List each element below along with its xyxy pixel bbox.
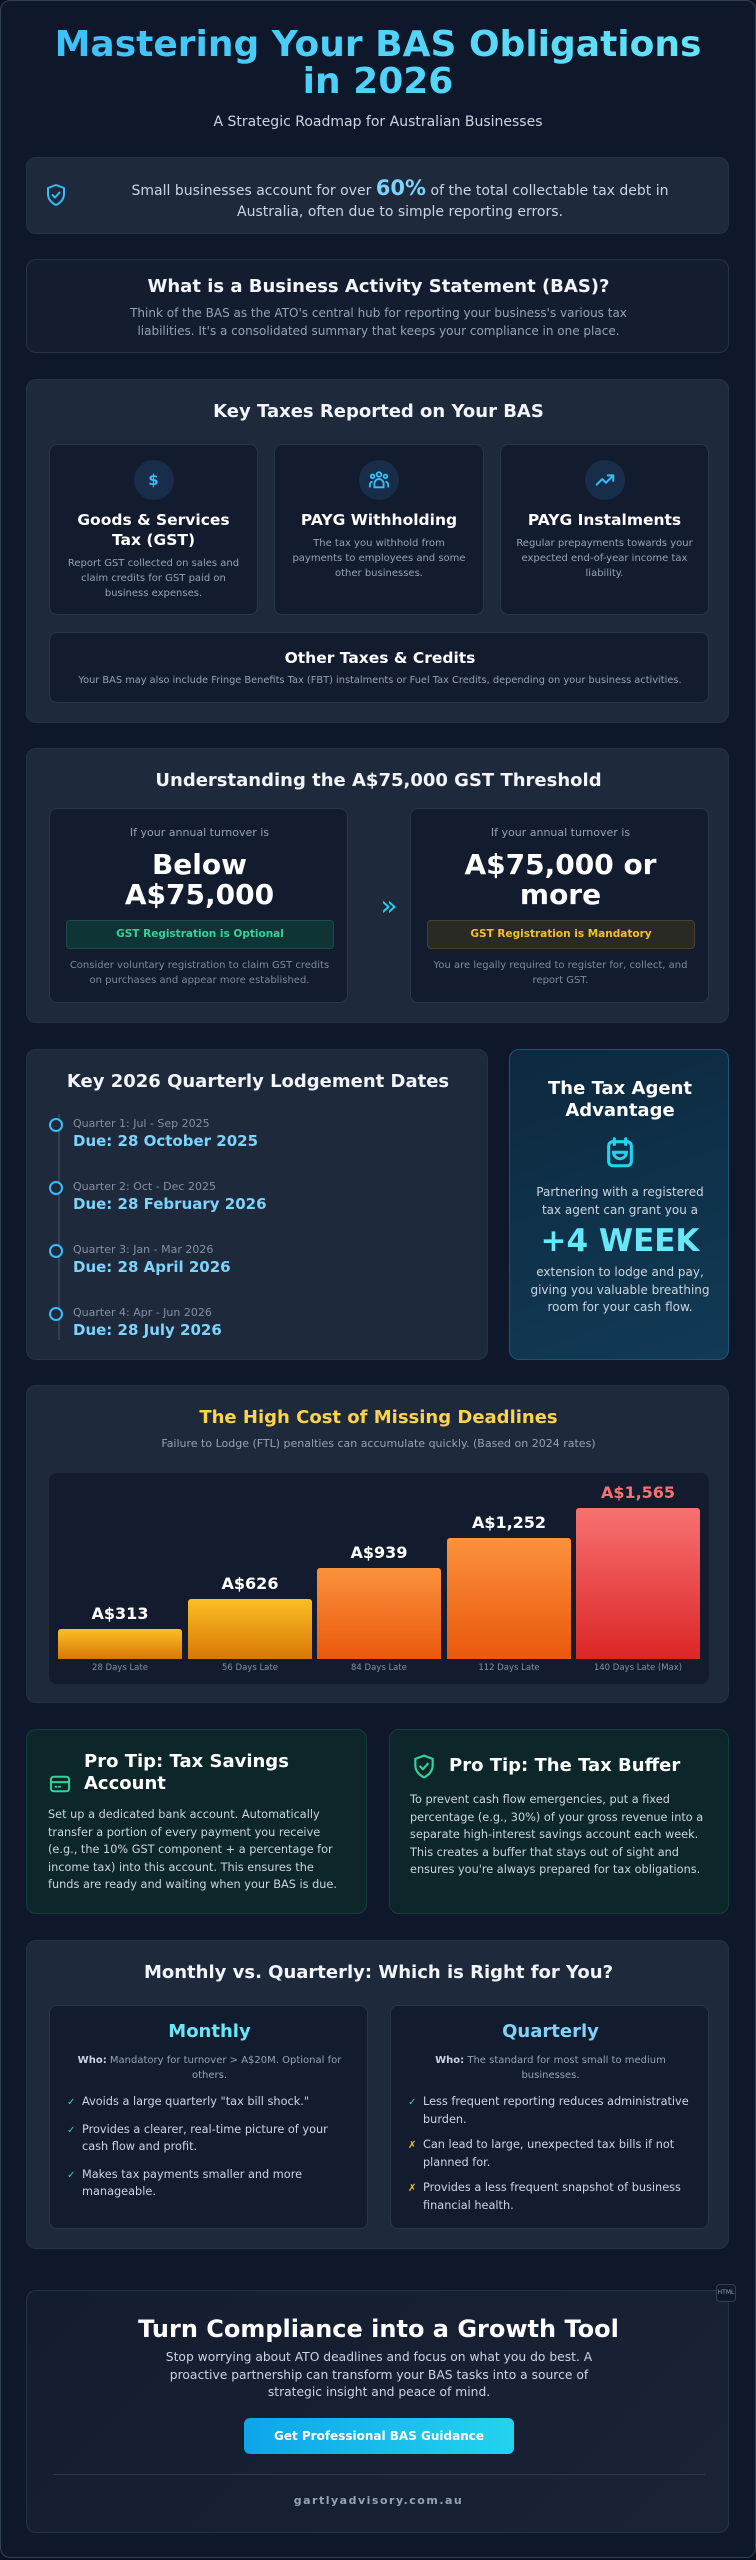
item q4: Due: 28 July 2026 <box>73 1321 222 1339</box>
icon: dollar: $ <box>148 471 159 489</box>
card: PAYG instalments <box>500 444 709 615</box>
button <box>244 2418 514 2454</box>
item q3 <box>49 1243 231 1276</box>
badge: HTML: HTML <box>718 2289 734 2296</box>
stat callout <box>26 157 729 234</box>
bar 84: 84 Days Late <box>351 1663 407 1673</box>
card: above: more <box>520 878 601 911</box>
item q2: Due: 28 February 2026 <box>73 1195 267 1213</box>
bar 56: 56 Days Late <box>222 1663 278 1673</box>
bar 112: A$1,252 <box>472 1513 546 1532</box>
bar 56 <box>188 1574 312 1673</box>
title <box>0 26 756 100</box>
heading: Key 2026 Quarterly Lodgement Dates <box>67 1071 449 1092</box>
title: Mastering Your BAS Obligations <box>55 24 701 65</box>
card: monthly: Avoids a large quarterly "tax bill shock." <box>82 2095 309 2108</box>
heading: Monthly vs. Quarterly: Which is Right for You? <box>144 1962 613 1983</box>
bar 28 <box>58 1604 182 1673</box>
text: To prevent cash flow emergencies, put a fixed percentage (e.g., 30%) of your gross revenue into a separate high-interest savings account each week. This creates a buffer that stays out of sight and ensures you're always prepared for tax obligations. <box>410 1793 703 1876</box>
card: GST <box>49 444 258 615</box>
card: below <box>49 808 348 1003</box>
panel: tip savings account <box>26 1729 367 1914</box>
item q2: Quarter 2: Oct - Dec 2025 <box>73 1180 216 1193</box>
domain: gartlyadvisory.com.au <box>294 2494 463 2507</box>
heading: Turn Compliance into a Growth Tool <box>138 2315 619 2343</box>
heading: Advantage <box>565 1100 675 1121</box>
icon: users <box>359 460 399 500</box>
item q4: Quarter 4: Apr - Jun 2026 <box>73 1306 212 1319</box>
icon: calendar <box>607 1137 633 1168</box>
card: monthly: ✓ <box>67 2170 75 2180</box>
heading <box>84 1751 289 1794</box>
card: PAYG withholding: PAYG Withholding <box>301 511 457 529</box>
panel: tax agent advantage <box>509 1049 729 1360</box>
card: other taxes <box>49 632 709 703</box>
card: monthly: ✓ <box>67 2097 75 2108</box>
panel: cost of missing deadlines <box>26 1385 729 1703</box>
card: below: GST Registration is Optional <box>116 928 284 940</box>
heading: Pro Tip: Tax Savings <box>84 1751 289 1772</box>
heading: The Tax Agent <box>548 1078 692 1099</box>
button: Get Professional BAS Guidance <box>274 2429 484 2443</box>
heading: Account <box>84 1773 166 1794</box>
card: below: A$75,000 <box>125 878 274 911</box>
text: Think of the BAS as the ATO's central hub for reporting your business's various tax liabilities. It's a consolidated summary that keeps your compliance in one place. <box>130 306 627 338</box>
stat text: Small businesses account for over 60% of the total collectable tax debt in Australia, often due to simple reporting errors. <box>131 176 668 220</box>
text: Set up a dedicated bank account. Automatically transfer a portion of every payment you receive (e.g., the 10% GST component + a percentage for income tax) into this account. This ensures the funds are ready and waiting when your BAS is due. <box>48 1808 337 1891</box>
heading: What is a Business Activity Statement (BAS)? <box>148 276 609 297</box>
item q3: Quarter 3: Jan - Mar 2026 <box>73 1243 213 1256</box>
icon: card <box>50 1776 70 1792</box>
card: monthly <box>49 2005 368 2229</box>
heading: Pro Tip: The Tax Buffer <box>449 1755 680 1776</box>
icon: shield check <box>414 1754 434 1778</box>
card: quarterly <box>390 2005 709 2229</box>
heading <box>548 1078 692 1121</box>
card: quarterly: ✗ <box>408 2183 416 2194</box>
card: GST: Report GST collected on sales and claim credits for GST paid on business expenses. <box>68 558 239 599</box>
item q1: Quarter 1: Jul - Sep 2025 <box>73 1117 210 1130</box>
card: above: If your annual turnover is <box>491 826 630 839</box>
card: below: If your annual turnover is <box>130 826 269 839</box>
card: monthly: Provides a clearer, real-time picture of your cash flow and profit. <box>82 2122 328 2153</box>
badge: HTML <box>716 2284 736 2302</box>
panel: tax agent advantage: extension to lodge and pay, giving you valuable breathing room for your cash flow. <box>530 1265 710 1314</box>
subtitle: A Strategic Roadmap for Australian Businesses <box>213 114 543 130</box>
card: monthly: Who: Mandatory for turnover > A$20M. Optional for others. <box>78 2055 341 2081</box>
timeline <box>49 1114 267 1340</box>
card: monthly: Makes tax payments smaller and more manageable. <box>82 2168 302 2198</box>
heading: The High Cost of Missing Deadlines <box>199 1407 558 1428</box>
card: monthly: ✓ <box>67 2124 75 2136</box>
card: quarterly: ✓ <box>408 2097 416 2108</box>
card: quarterly: Can lead to large, unexpected tax bills if not planned for. <box>423 2138 674 2168</box>
bar 140: 140 Days Late (Max) <box>594 1663 682 1673</box>
card: above <box>410 808 709 1003</box>
bar 56: A$626 <box>222 1574 278 1593</box>
big stat: +4 WEEK <box>541 1223 699 1259</box>
card: quarterly: Less frequent reporting reduces administrative burden. <box>423 2095 689 2126</box>
text: Partnering with a registered tax agent can grant you a <box>536 1185 704 1217</box>
panel: tip tax buffer <box>389 1729 729 1914</box>
item q1 <box>49 1117 258 1150</box>
card: quarterly: Quarterly <box>502 2021 599 2042</box>
icon: shield <box>47 184 65 206</box>
bar chart <box>49 1473 709 1684</box>
bar 112: 112 Days Late <box>478 1663 540 1673</box>
card: monthly: Monthly <box>168 2021 251 2042</box>
bar 140 <box>576 1483 700 1673</box>
card: PAYG instalments: Regular prepayments towards your expected end-of-year income tax liability. <box>516 538 693 579</box>
card: below: Consider voluntary registration to claim GST credits on purchases and appear more established. <box>70 960 329 986</box>
card: above: A$75,000 or <box>464 848 656 881</box>
title: in 2026 <box>303 61 453 102</box>
card: quarterly: Who: The standard for most small to medium businesses. <box>435 2055 666 2081</box>
card: other taxes: Your BAS may also include Fringe Benefits Tax (FBT) instalments or Fuel Tax Credits, depending on your business activities. <box>78 675 682 686</box>
item q3: Due: 28 April 2026 <box>73 1258 231 1276</box>
heading: Key Taxes Reported on Your BAS <box>213 401 544 422</box>
card: below: Below <box>152 848 247 881</box>
subtitle: Failure to Lodge (FTL) penalties can accumulate quickly. (Based on 2024 rates) <box>161 1437 596 1450</box>
panel: what is BAS <box>26 259 729 353</box>
bar 140: A$1,565 <box>601 1483 675 1502</box>
item q4 <box>49 1306 222 1339</box>
panel: CTA <box>26 2290 729 2533</box>
bar 84 <box>317 1543 441 1673</box>
panel: monthly vs quarterly <box>26 1940 729 2249</box>
icon: trend <box>584 460 624 500</box>
bar 28: A$313 <box>92 1604 148 1623</box>
bar 84: A$939 <box>351 1543 407 1562</box>
panel: GST threshold <box>26 748 729 1023</box>
item q1: Due: 28 October 2025 <box>73 1132 258 1150</box>
panel: key taxes <box>26 379 729 723</box>
text: Stop worrying about ATO deadlines and focus on what you do best. A proactive partnership can transform your BAS tasks into a source of strategic insight and peace of mind. <box>166 2350 592 2399</box>
card: PAYG withholding <box>274 444 484 615</box>
card: GST: Goods & Services Tax (GST) <box>77 511 230 549</box>
card: quarterly: ✗ <box>408 2140 416 2151</box>
item q2 <box>49 1180 267 1213</box>
bar 28: 28 Days Late <box>92 1663 148 1673</box>
card: PAYG instalments: PAYG Instalments <box>528 511 681 529</box>
card: PAYG withholding: The tax you withhold from payments to employees and some other businesses. <box>292 538 466 579</box>
bar 112 <box>447 1513 571 1673</box>
card: above: You are legally required to register for, collect, and report GST. <box>434 960 687 986</box>
card: other taxes: Other Taxes & Credits <box>285 649 475 667</box>
icon: dollar <box>134 460 174 500</box>
card: above: GST Registration is Mandatory <box>470 928 652 940</box>
panel: lodgement dates <box>26 1049 488 1360</box>
card: quarterly: Provides a less frequent snapshot of business financial health. <box>423 2181 681 2212</box>
heading: Understanding the A$75,000 GST Threshold <box>155 770 602 791</box>
arrow: chevron: » <box>380 889 398 922</box>
